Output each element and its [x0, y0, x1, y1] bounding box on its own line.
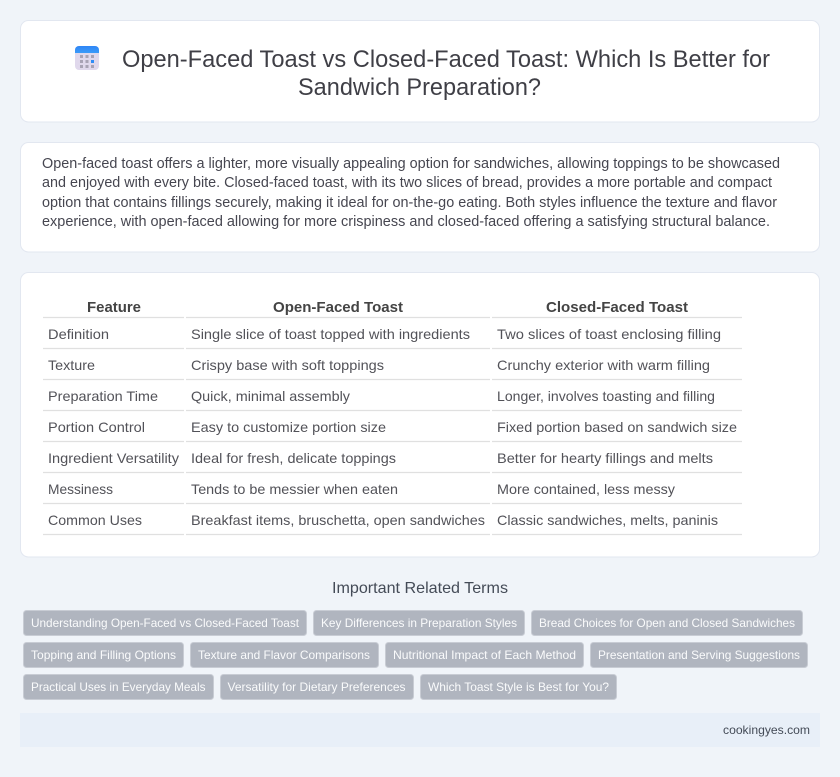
row: texture: Texture: [48, 357, 95, 373]
row: messiness: Messiness: [48, 481, 113, 497]
footer: cookingyes.com: [723, 723, 810, 737]
title: [122, 46, 770, 101]
row: portion control: Easy to customize portion size: [191, 419, 386, 435]
row: definition: Two slices of toast enclosing filling: [497, 326, 721, 342]
row: preparation time: Longer, involves toasting and filling: [497, 388, 715, 404]
title: Open-Faced Toast vs Closed-Faced Toast: Which Is Better for: [122, 46, 770, 73]
table header: Open-Faced Toast: [273, 299, 403, 316]
heading: important related terms: Important Related Terms: [332, 580, 508, 597]
panel: comparison table: [20, 272, 820, 557]
row: definition: Definition: [48, 326, 109, 342]
row: portion control: Fixed portion based on sandwich size: [497, 419, 737, 435]
row: preparation time: Quick, minimal assembly: [191, 388, 350, 404]
description text: [42, 156, 780, 230]
table header: Feature: [87, 299, 141, 316]
row: portion control: [48, 419, 737, 435]
related term chips: Presentation and Serving Suggestions: [598, 648, 800, 662]
title: Sandwich Preparation?: [298, 74, 541, 101]
table header: Closed-Faced Toast: [546, 299, 688, 316]
related term chips: Nutritional Impact of Each Method: [393, 648, 576, 662]
related term chips: [24, 610, 808, 700]
related term chips: Practical Uses in Everyday Meals: [31, 680, 206, 694]
row: definition: [48, 326, 721, 342]
related term chips: Key Differences in Preparation Styles: [321, 616, 517, 630]
row: common uses: Breakfast items, bruschetta, open sandwiches: [191, 512, 485, 528]
icon: calendar: [75, 46, 99, 70]
row: common uses: [48, 512, 718, 528]
related term chips: Which Toast Style is Best for You?: [428, 680, 609, 694]
row: ingredient versatility: Ideal for fresh, delicate toppings: [191, 450, 396, 466]
description text: Open-faced toast offers a lighter, more visually appealing option for sandwiches, allowing toppings to be showcased: [42, 156, 780, 172]
row: portion control: Portion Control: [48, 419, 145, 435]
row: ingredient versatility: [48, 450, 713, 466]
row: ingredient versatility: Better for hearty fillings and melts: [497, 450, 713, 466]
row: preparation time: Preparation Time: [48, 388, 158, 404]
description text: option that contains fillings securely, making it ideal for on-the-go eating. Both styles influence the texture and flavor: [42, 195, 777, 211]
row: messiness: [48, 481, 675, 497]
row: texture: Crispy base with soft toppings: [191, 357, 384, 373]
related term chips: Versatility for Dietary Preferences: [228, 680, 406, 694]
row: texture: [48, 357, 710, 373]
footer: [20, 713, 820, 747]
related term chips: Understanding Open-Faced vs Closed-Faced Toast: [31, 616, 300, 630]
panel: description: [20, 142, 820, 252]
related term chips: Texture and Flavor Comparisons: [198, 648, 370, 662]
description text: and enjoyed with every bite. Closed-faced toast, with its two slices of bread, provides a more portable and compact: [42, 175, 772, 191]
row: messiness: More contained, less messy: [497, 481, 675, 497]
related term chips: Bread Choices for Open and Closed Sandwiches: [539, 616, 795, 630]
row: ingredient versatility: Ingredient Versatility: [48, 450, 179, 466]
row: common uses: Classic sandwiches, melts, paninis: [497, 512, 718, 528]
header panel: [20, 20, 820, 122]
row: texture: Crunchy exterior with warm filling: [497, 357, 710, 373]
row: messiness: Tends to be messier when eaten: [191, 481, 398, 497]
related term chips: Topping and Filling Options: [31, 648, 176, 662]
row: common uses: Common Uses: [48, 512, 142, 528]
table header: [87, 299, 688, 316]
row: definition: Single slice of toast topped with ingredients: [191, 326, 470, 342]
description text: experience, with open-faced allowing for more crispiness and closed-faced offering a satisfying structural balance.: [42, 214, 770, 230]
row: preparation time: [48, 388, 715, 404]
